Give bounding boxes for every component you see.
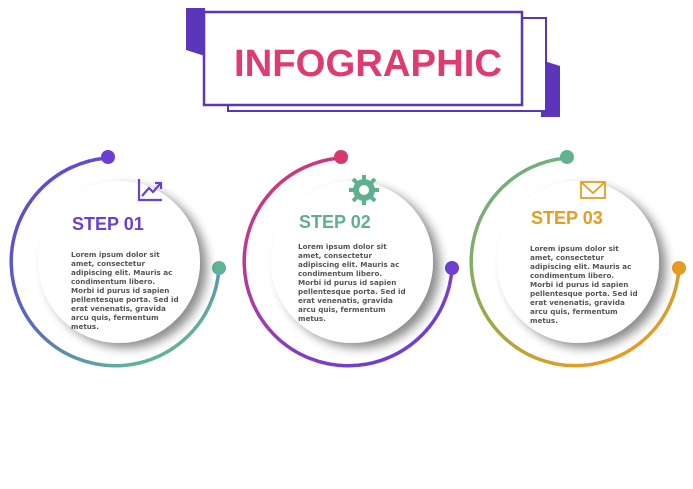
panel: step 02: erat venenatis, gravida	[298, 296, 393, 305]
title banner	[186, 8, 560, 117]
panel: step 02: amet, consectetur	[298, 251, 372, 260]
panel: step 02: pellentesque porta. Sed id	[298, 287, 406, 296]
panel: step 03: erat venenatis, gravida	[530, 298, 625, 307]
panel: step 01: erat venenatis, gravida	[71, 304, 166, 313]
panel: step 01: pellentesque porta. Sed id	[71, 295, 179, 304]
panel: step 01: metus.	[71, 322, 99, 331]
panel: step 03: pellentesque porta. Sed id	[530, 289, 638, 298]
panel: step 01: Morbi id purus id sapien	[71, 286, 169, 295]
panel: step 01: condimentum libero.	[71, 277, 155, 286]
panel: step 03: amet, consectetur	[530, 253, 604, 262]
panel: step 01: arcu quis, fermentum	[71, 313, 159, 322]
icon: gear	[349, 175, 379, 205]
title text: INFOGRAPHIC	[234, 43, 502, 85]
panel: step 01: STEP 01	[72, 214, 144, 234]
panel: step 01	[11, 150, 226, 366]
icon: chart	[139, 179, 162, 200]
panel: step 02: STEP 02	[299, 212, 371, 232]
panel: step 02: arcu quis, fermentum	[298, 305, 386, 314]
panel: step 03	[471, 150, 686, 366]
panel: step 01: amet, consectetur	[71, 259, 145, 268]
panel: step 02	[244, 150, 459, 366]
panel: step 03: metus.	[530, 316, 558, 325]
panel: step 01: adipiscing elit. Mauris ac	[71, 268, 172, 277]
panel: step 03: condimentum libero.	[530, 271, 614, 280]
panel: step 02: condimentum libero.	[298, 269, 382, 278]
panel: step 03: adipiscing elit. Mauris ac	[530, 262, 631, 271]
panel: step 03: Morbi id purus id sapien	[530, 280, 628, 289]
panel: step 02: Morbi id purus id sapien	[298, 278, 396, 287]
panel: step 02: adipiscing elit. Mauris ac	[298, 260, 399, 269]
panel: step 03: STEP 03	[531, 208, 603, 228]
panel: step 03: arcu quis, fermentum	[530, 307, 618, 316]
icon: envelope	[581, 182, 605, 198]
panel: step 03: Lorem ipsum dolor sit	[530, 244, 619, 253]
panel: step 01: Lorem ipsum dolor sit	[71, 250, 160, 259]
panel: step 02: Lorem ipsum dolor sit	[298, 242, 387, 251]
panel: step 02: metus.	[298, 314, 326, 323]
